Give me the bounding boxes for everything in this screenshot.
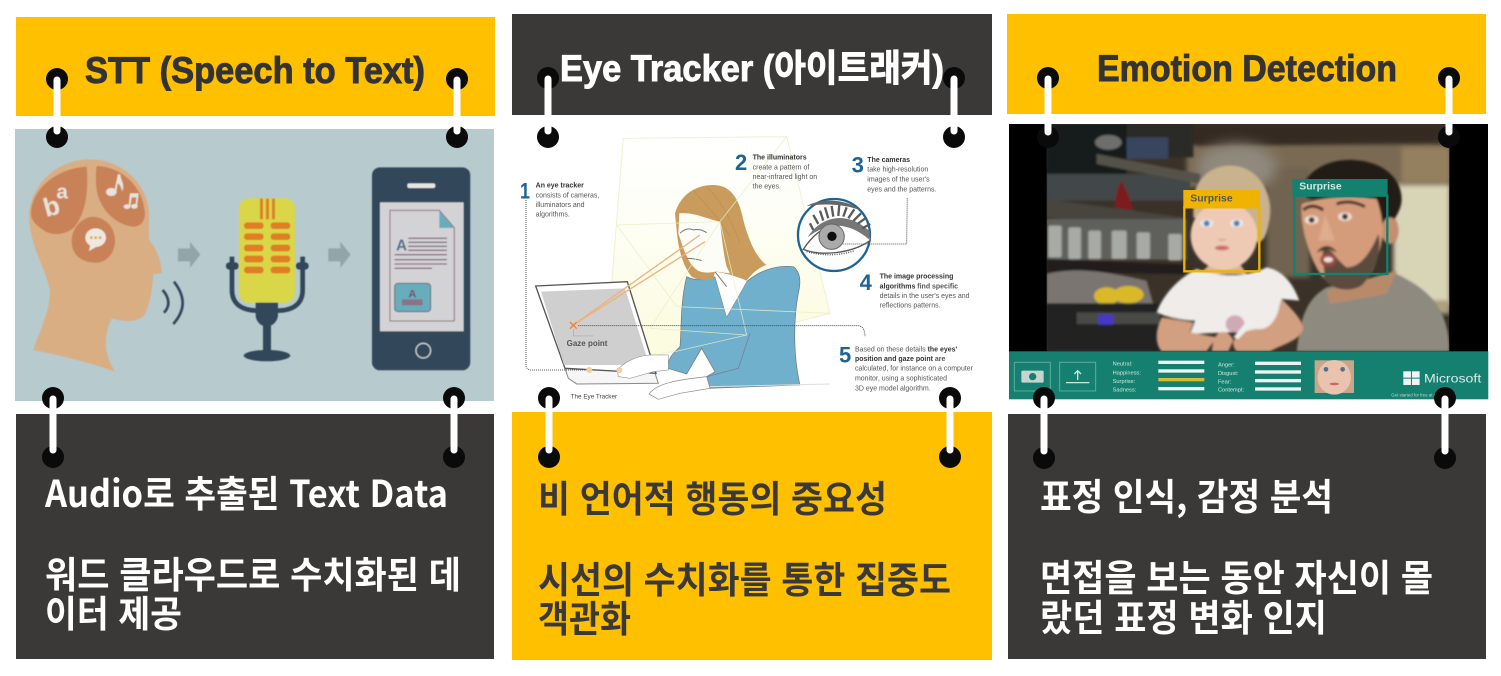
icon: upload button: [1060, 362, 1096, 391]
emotion scores left: Neutral:: [1113, 361, 1133, 367]
callout 4: 4: [860, 270, 873, 295]
emotion scores left: Happiness:: [1113, 370, 1141, 376]
callout 2: near-infrared light on: [753, 174, 817, 181]
heading: Emotion Detection: Emotion Detection: [1097, 48, 1397, 89]
arrow: microphone to phone: [328, 242, 351, 268]
callout 1: An eye tracker: [536, 183, 584, 190]
child: [1157, 166, 1303, 351]
cone lines over figure: [617, 137, 830, 352]
text block: Emotion Detection description: 표정 인식, 감정 분석: [1040, 467, 1333, 521]
illustration: how an eye tracker works: [520, 137, 974, 400]
face box: child surprise: [1183, 190, 1260, 271]
callout 3: 3: [852, 153, 864, 178]
text block: STT description: Audio로 추출된 Text Data: [44, 464, 448, 518]
callout 3: images of the user's: [867, 177, 930, 184]
panel: Eye Tracker: [512, 14, 992, 660]
callout 4: [860, 270, 970, 310]
callout 5: calculated, for instance on a computer: [855, 366, 974, 373]
callout 3: The cameras: [867, 157, 910, 164]
footer note: Get started for free at microsoft.ai: [1391, 393, 1456, 398]
icon: head with brain: [29, 159, 162, 372]
laptop: [536, 282, 658, 384]
app toolbar: [1009, 351, 1488, 399]
callout 2: create a pattern of: [753, 164, 809, 171]
arrow: head to microphone: [178, 242, 200, 268]
icon: head with brain: a: [56, 181, 68, 204]
face box: man surprise: [1292, 179, 1388, 274]
heading: Eye Tracker: Eye Tracker (아이트래커): [560, 48, 944, 89]
callout 1: algorithms.: [536, 212, 570, 219]
label: the eye tracker: The Eye Tracker: [571, 393, 617, 400]
callout 2: The illuminators: [753, 154, 807, 161]
callout 1: illuminators and: [536, 202, 585, 209]
callout 5: Based on these details the eyes': [855, 346, 958, 353]
callout 1: consists of cameras,: [536, 192, 599, 199]
callout 1: [520, 178, 599, 219]
face thumbnail: [1315, 360, 1354, 395]
hands: [617, 355, 830, 399]
label: gaze point: Gaze point: [567, 339, 608, 348]
emotion scores left: [1113, 361, 1204, 394]
callout 4: reflections patterns.: [880, 303, 941, 310]
logo: Microsoft: Microsoft: [1424, 372, 1482, 386]
callout 5: 3D eye model algorithm.: [855, 385, 931, 392]
eye close-up: [798, 198, 907, 271]
text block: Eye Tracker description: 시선의 수치화를 통한 집중도: [538, 550, 951, 604]
illuminator light cone: [605, 137, 830, 367]
heading: Emotion Detection: [1007, 14, 1486, 114]
icon: smartphone with document: [372, 167, 470, 370]
eye tracker sensors: [586, 367, 592, 373]
callout 5: position and gaze point are: [855, 356, 946, 363]
callout 4: The image processing: [880, 274, 953, 281]
photo: emotion detection demo: [1009, 124, 1488, 399]
panel: Emotion Detection: [1007, 14, 1488, 659]
text block: STT description: [16, 414, 494, 659]
icon: smartphone with document: A: [408, 288, 416, 300]
callout 4: details in the user's eyes and: [880, 293, 970, 300]
emotion scores right: Anger:: [1218, 362, 1235, 368]
heading: Eye Tracker: [512, 14, 992, 115]
face box: man surprise: Surprise: [1299, 182, 1342, 193]
man: [1297, 160, 1449, 351]
callout 5: monitor, using a sophisticated: [855, 376, 947, 383]
callout 2: the eyes.: [753, 184, 781, 191]
photo background: [1047, 124, 1450, 351]
text block: Emotion Detection description: 랐던 표정 변화 인지: [1040, 588, 1327, 642]
callout 3: eyes and the patterns.: [867, 186, 936, 193]
panel: STT: [15, 17, 495, 659]
icon: smartphone with document: A: [396, 238, 407, 255]
emotion scores right: Fear:: [1218, 379, 1232, 385]
callout 2: [735, 150, 817, 191]
text block: Emotion Detection description: 면접을 보는 동안 자신이 몰: [1040, 548, 1433, 602]
woman: [668, 185, 800, 388]
text block: STT description: 이터 제공: [45, 584, 182, 638]
icon: camera button: [1014, 362, 1050, 391]
icon: head with brain: b: [40, 190, 63, 223]
heading: STT: STT (Speech to Text): [85, 50, 425, 91]
callout 4: algorithms find specific: [880, 283, 958, 290]
emotion scores right: Contempt:: [1218, 388, 1245, 394]
text block: Eye Tracker description: 객관화: [538, 589, 631, 643]
gaze rays: [573, 235, 705, 325]
icon: sound waves: [163, 282, 183, 324]
callout 5: 5: [839, 343, 851, 368]
icon: microphone: [226, 198, 309, 361]
binder pins: [42, 67, 1460, 469]
callout 1: 1: [520, 178, 530, 203]
text block: Emotion Detection description: [1008, 414, 1486, 659]
face box: child surprise: Surprise: [1190, 193, 1233, 204]
emotion scores right: [1218, 362, 1301, 394]
text block: Eye Tracker description: [512, 412, 992, 660]
text block: Eye Tracker description: 비 언어적 행동의 중요성: [538, 469, 887, 523]
emotion scores left: Sadness:: [1113, 388, 1137, 394]
callout 2: 2: [735, 150, 747, 175]
logo: Microsoft: [1403, 371, 1482, 386]
text block: STT description: 워드 클라우드로 수치화된 데: [45, 545, 461, 599]
emotion scores left: Surprise:: [1113, 379, 1136, 385]
callout 3: [852, 153, 936, 193]
dotted leaders: [526, 200, 587, 370]
heading: STT: [16, 17, 495, 116]
callout 3: take high-resolution: [867, 167, 928, 174]
callout 5: [839, 343, 974, 392]
illustration: speech to text flow: [15, 129, 494, 401]
emotion scores right: Disgust:: [1218, 371, 1239, 377]
